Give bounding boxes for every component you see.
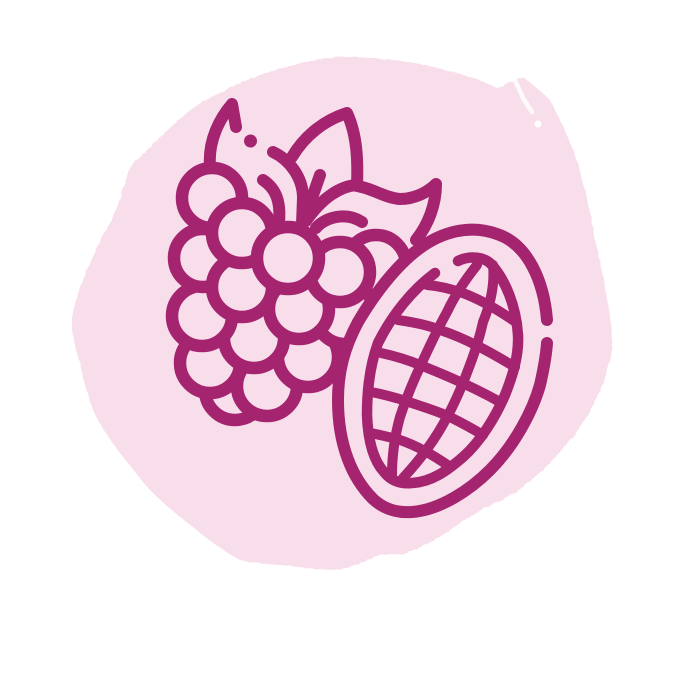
- cocoa pod outer shell: [338, 230, 547, 512]
- cocoa pod ribs: [371, 265, 517, 478]
- raspberry drupelets: [172, 168, 406, 420]
- cocoa pod inner shell: [367, 258, 518, 483]
- raspberry stems: [210, 104, 320, 224]
- raspberry leaves: [292, 113, 436, 240]
- watercolor blob background: [72, 57, 612, 570]
- raspberry: [172, 104, 436, 420]
- cocoa pod: [338, 230, 547, 512]
